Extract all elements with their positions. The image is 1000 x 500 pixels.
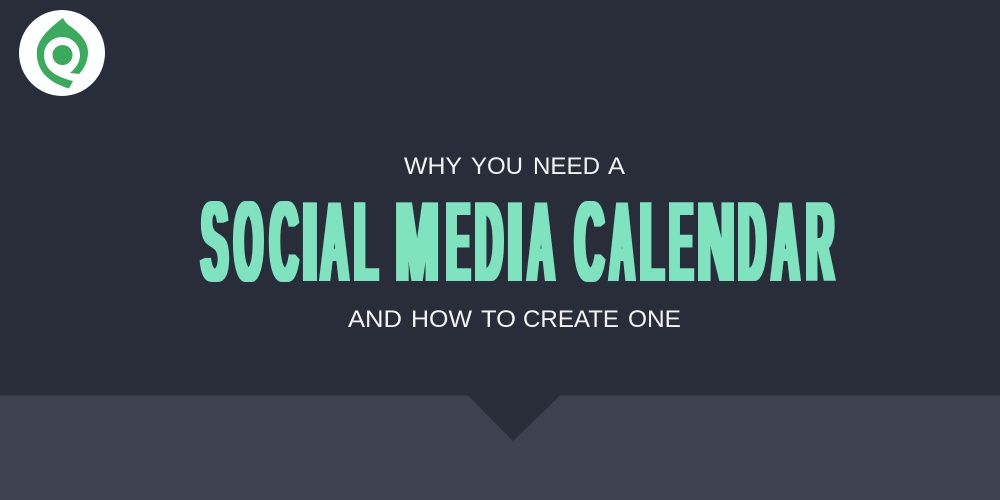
title word: calendar: A — [610, 178, 634, 306]
title word: social: C — [270, 178, 298, 306]
title word: calendar: C — [575, 178, 604, 306]
banner: R — [806, 178, 834, 306]
title word: media: M — [396, 178, 438, 306]
bottom band with notch — [0, 396, 1000, 500]
title word: calendar: D — [738, 178, 766, 306]
title word: calendar: E — [670, 178, 692, 306]
title word: calendar: A — [772, 178, 799, 306]
logo: white circle — [19, 10, 105, 96]
title word: media: I — [507, 178, 523, 306]
icon: green leaf ring — [37, 18, 88, 88]
title word: social: O — [234, 178, 262, 306]
logo — [19, 10, 105, 96]
subtitle bottom: CREATE — [523, 306, 619, 333]
subtitle bottom: HOW — [411, 306, 473, 333]
title word: calendar: N — [698, 178, 734, 306]
subtitle bottom: TO — [481, 306, 516, 333]
subtitle bottom: AND — [348, 306, 402, 333]
title word: media: E — [447, 178, 470, 306]
title word: media: D — [476, 178, 503, 306]
icon: green centre dot — [52, 45, 72, 65]
subtitle bottom: ONE — [628, 306, 681, 333]
subtitle bottom — [348, 306, 681, 333]
subtitle top: NEED — [533, 153, 600, 180]
title word: social: I — [302, 178, 318, 306]
title word: calendar: L — [640, 178, 663, 306]
subtitle top: YOU — [471, 153, 523, 180]
title word: social: S — [202, 178, 228, 306]
subtitle top — [404, 153, 626, 180]
main title: A — [528, 178, 554, 306]
subtitle top: A — [608, 153, 626, 180]
main title — [202, 178, 834, 306]
main title: L — [354, 178, 377, 306]
title word: social: A — [321, 178, 348, 306]
subtitle top: WHY — [404, 153, 462, 180]
